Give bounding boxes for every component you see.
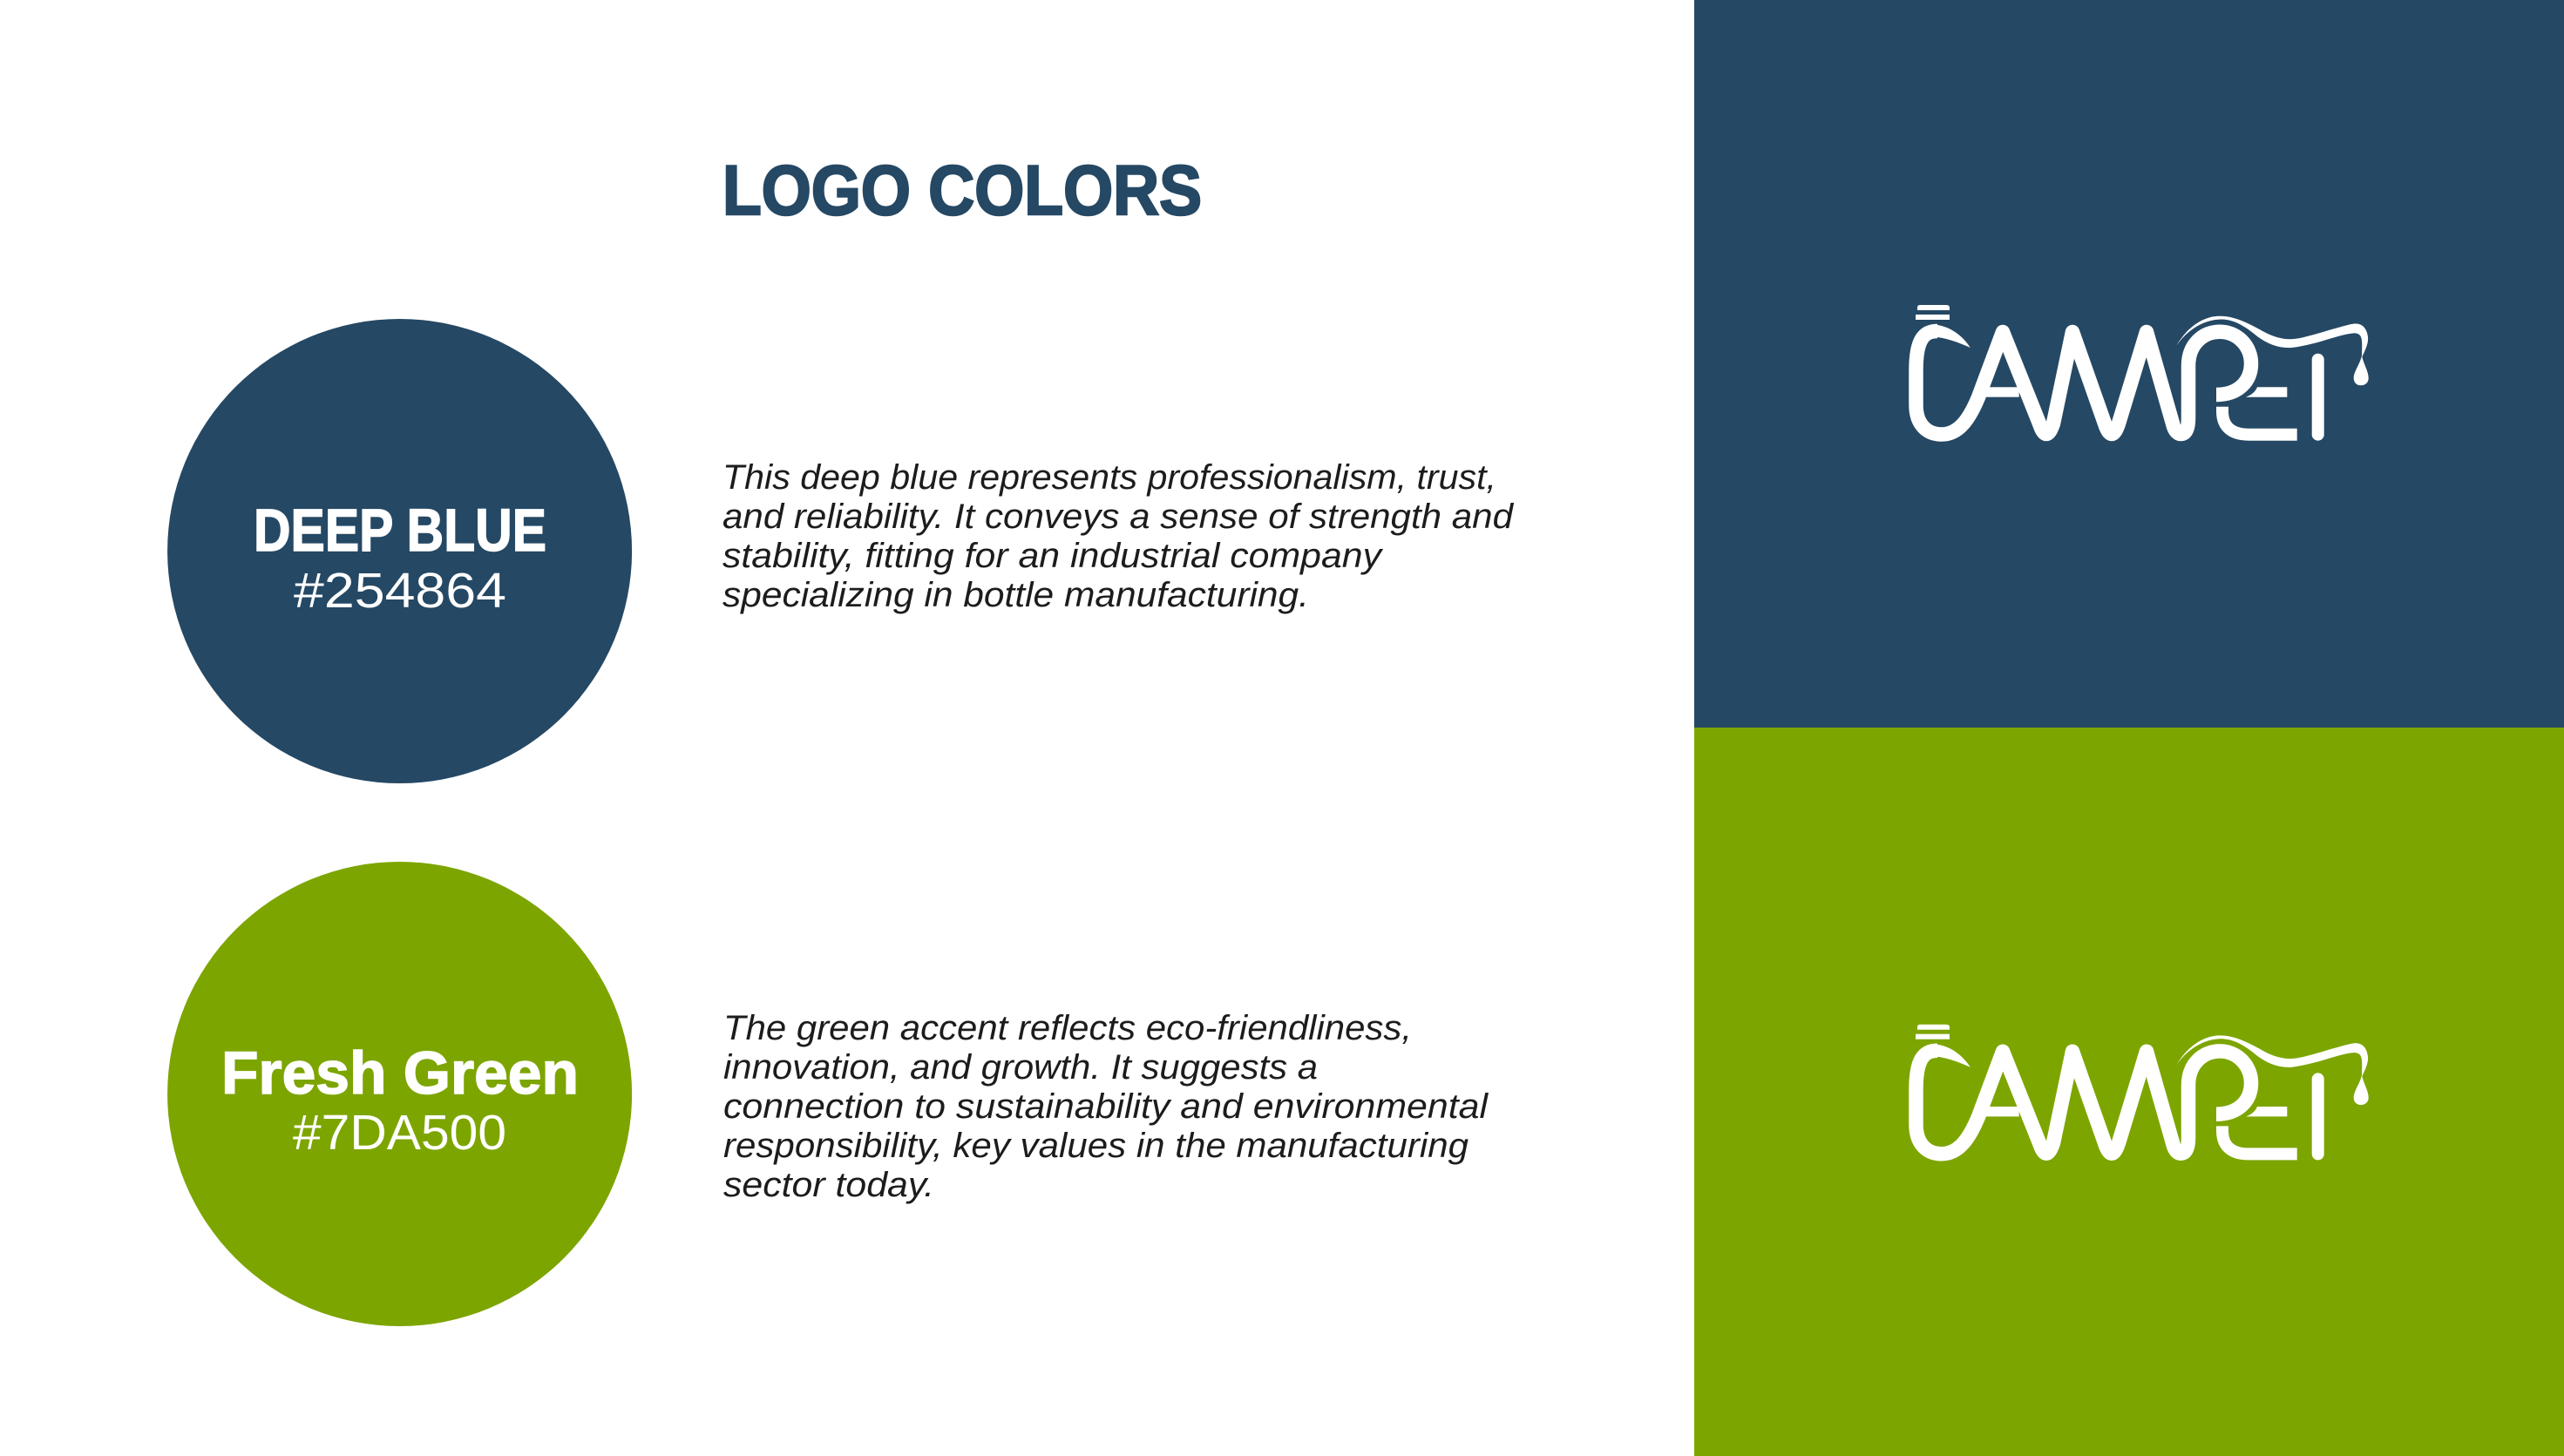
logo: CAMPET on deep blue (1916, 305, 2369, 435)
logo: CAMPET on fresh green (1916, 1025, 2369, 1154)
text block: fresh green description: innovation, and growth. It suggests a (723, 1048, 1318, 1087)
swatch name: deep blue: DEEP BLUE (254, 497, 546, 564)
swatch hex: deep blue: #254864 (294, 563, 506, 619)
text block: deep blue description: and reliability. It conveys a sense of strength and (722, 498, 1515, 536)
swatch name: fresh green: Fresh Green (221, 1040, 579, 1107)
text block: fresh green description: responsibility, key values in the manufacturing (723, 1127, 1469, 1165)
text block: fresh green description: connection to sustainability and environmental (723, 1087, 1489, 1126)
swatch hex: fresh green: #7DA500 (293, 1105, 506, 1161)
text block: fresh green description (723, 1009, 1489, 1204)
swatch: fresh green (167, 862, 632, 1326)
text block: fresh green description: sector today. (723, 1166, 934, 1204)
panel: deep blue logo background (1694, 0, 2564, 728)
title: LOGO COLORS (722, 152, 1202, 230)
panel: fresh green logo background (1694, 728, 2564, 1456)
text block: fresh green description: The green accent reflects eco-friendliness, (723, 1009, 1412, 1047)
swatch: deep blue (167, 319, 632, 783)
text block: deep blue description: stability, fitting for an industrial company (722, 537, 1384, 575)
text block: deep blue description: This deep blue represents professionalism, trust, (722, 458, 1496, 497)
text block: deep blue description (722, 458, 1515, 614)
text block: deep blue description: specializing in bottle manufacturing. (722, 576, 1309, 614)
